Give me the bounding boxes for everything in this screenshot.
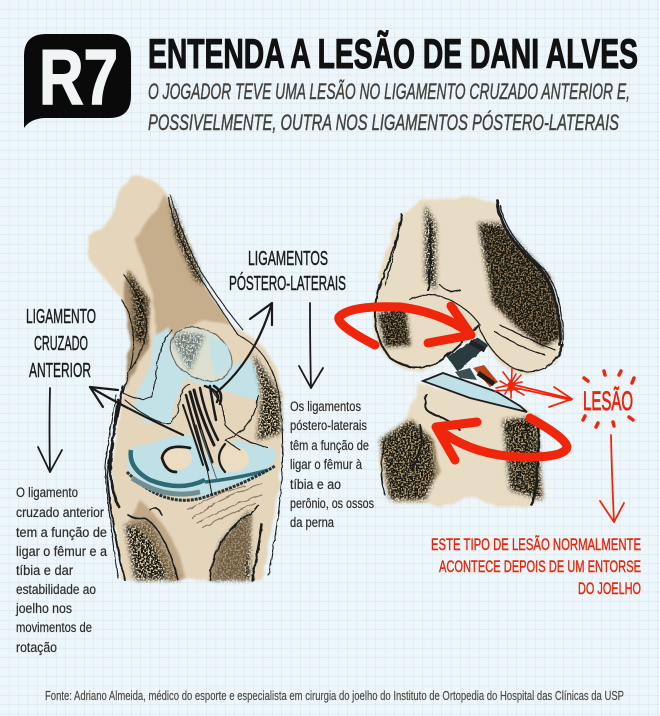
text: lesion note bbox=[431, 535, 641, 598]
arrow: to ligamento cruzado bbox=[90, 387, 183, 435]
arrow: to ligamentos postero-laterais bbox=[217, 303, 272, 392]
text: ligamentos postero-laterais description: têm a função de bbox=[290, 438, 369, 453]
text: ligamento cruzado description: rotação bbox=[16, 640, 57, 655]
label: ligamento cruzado anterior: LIGAMENTO bbox=[26, 306, 96, 328]
icon: lesao burst marks bbox=[583, 371, 634, 427]
label: lesao bbox=[583, 371, 634, 427]
text: ligamentos postero-laterais description: da perna bbox=[290, 515, 334, 530]
label: ligamento cruzado anterior: CRUZADO bbox=[34, 333, 88, 355]
femur shading bbox=[378, 205, 562, 500]
label: ligamentos postero-laterais bbox=[229, 248, 346, 295]
label: ligamentos postero-laterais: LIGAMENTOS bbox=[248, 248, 328, 270]
arrow: burst to lesao bbox=[515, 385, 572, 407]
text: ligamento cruzado description: movimentos de bbox=[16, 620, 92, 635]
label: ligamentos postero-laterais: PÓSTERO-LATERAIS bbox=[229, 272, 346, 295]
femur wash bbox=[373, 197, 562, 373]
icon: R7 logo: R7 bbox=[39, 33, 118, 121]
text: ligamentos postero-laterais description: Os ligamentos bbox=[290, 399, 361, 414]
label: ligamento cruzado anterior bbox=[26, 306, 96, 382]
text: ligamento cruzado description: tíbia e dar bbox=[16, 563, 73, 578]
illustration: injured knee bbox=[339, 197, 567, 507]
arrow: upper red rotation bbox=[339, 306, 471, 345]
text: ligamentos postero-laterais description: ligar o fêmur à bbox=[290, 457, 362, 472]
text: ligamentos postero-laterais description: perônio, os ossos bbox=[290, 496, 374, 511]
text: ligamentos postero-laterais description bbox=[290, 399, 374, 530]
tan hatching shadow bbox=[125, 500, 187, 580]
tibia wash bbox=[378, 384, 545, 507]
text: ligamento cruzado description: joelho nos bbox=[15, 601, 72, 616]
text: ligamento cruzado description: ligar o fêmur e a bbox=[16, 544, 107, 559]
text: ligamento cruzado description bbox=[15, 485, 107, 655]
text: ligamentos postero-laterais description: póstero-laterais bbox=[290, 418, 367, 433]
arrow: down to left text bbox=[38, 388, 62, 472]
torn ligament bbox=[447, 337, 498, 387]
arrow: lesao to red text bbox=[600, 435, 624, 522]
label: ligamento cruzado anterior: ANTERIOR bbox=[29, 360, 91, 382]
meniscus bbox=[423, 373, 527, 412]
outlines bbox=[105, 195, 283, 580]
text: ligamento cruzado description: cruzado anterior bbox=[16, 505, 104, 520]
femur cartilage bbox=[133, 328, 260, 423]
illustration: healthy knee bbox=[90, 175, 283, 580]
icon: injury burst bbox=[495, 368, 524, 398]
text: ligamento cruzado description: estabilidade ao bbox=[16, 582, 96, 597]
tibial plateau bbox=[127, 433, 277, 497]
ligaments bbox=[183, 386, 221, 495]
text: ligamento cruzado description: O ligamento bbox=[16, 485, 78, 500]
femur outlines bbox=[375, 200, 563, 505]
subtitle bbox=[148, 79, 630, 135]
patella bbox=[160, 316, 242, 392]
text: ligamentos postero-laterais description: tíbia e ao bbox=[290, 477, 341, 492]
arrow: lower red rotation bbox=[436, 418, 567, 460]
bone wash bbox=[90, 175, 283, 580]
text: ligamento cruzado description: tem a função de bbox=[16, 525, 107, 540]
arrow: down to middle text bbox=[299, 303, 323, 388]
hatching bbox=[125, 195, 281, 580]
